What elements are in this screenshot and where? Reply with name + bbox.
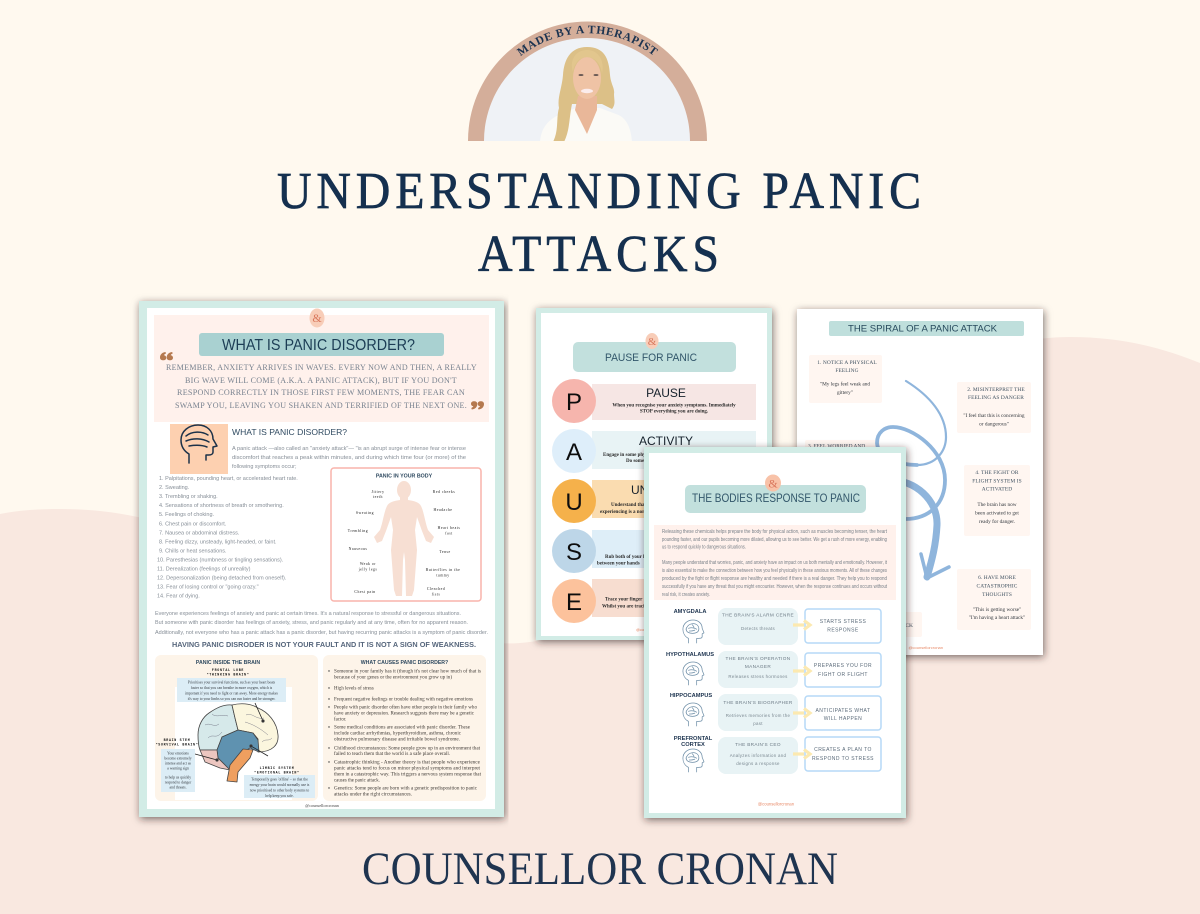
causes list [334,670,482,798]
causes list: Childhood circumstances: Some people grow up in an environment that [334,746,481,752]
symptom list: 1. Palpitations, pounding heart, or accelerated heart rate. [159,476,298,482]
row: hippocampus [670,693,881,731]
logo badge [310,308,324,328]
step 6: "This is getting worse" [973,607,1021,613]
body labels: Tense [439,550,451,554]
brain labels: "SURVIVAL BRAIN" [156,742,198,746]
logo badge: & [312,311,322,325]
row: amygdala: Detects threats [741,626,776,631]
heading bar: THE SPIRAL OF A PANIC ATTACK [848,324,997,334]
bold statement: HAVING PANIC DISRODER IS NOT YOUR FAULT AND IT IS NOT A SIGN OF WEAKNESS. [172,640,476,649]
intro panel: is also essential to make the connection between how you feel physically in these anxious moments. All of these changes [662,568,887,574]
page handle: @counsellorcronan [305,803,340,808]
page handle: @counsellorcronan [758,802,795,806]
callout: limbic system: now prioritised to other body systems to [250,788,309,792]
step U: experiencing is a normal response [600,510,673,515]
page: what is panic disorder [139,301,504,817]
row: hypothalamus: MANAGER [745,664,771,669]
page sheet [797,309,1043,655]
step S: between your hands [597,562,640,566]
row: amygdala: THE BRAIN'S ALARM CENRE [722,612,794,618]
quote text: REMEMBER, ANXIETY ARRIVES IN WAVES. EVERY NOW AND THEN, A REALLY [166,362,477,372]
callout: brain stem: intense and act as [165,762,192,766]
causes list: factor. [334,718,346,722]
body labels: Jittery [372,490,384,494]
background pink wave [0,337,1200,914]
row: prefrontal cortex: Analyzes information and [730,753,787,758]
symptom list: 3. Trembling or shaking. [159,494,218,500]
causes list: Someone in your family has it (though it's not clear how much of that is [334,670,481,674]
step 4: ACTIVATED [982,486,1012,492]
symptom list: 5. Feelings of choking. [159,512,215,518]
body labels: Headache [434,508,452,512]
callout: brain stem: Your emotions [167,752,189,756]
causes list: People with panic disorder often have other people in their family who [334,706,478,710]
symptom list: 4. Sensations of shortness of breath or smothering. [159,503,284,509]
bullet markers [328,670,330,789]
row: amygdala: RESPONSE [827,628,859,634]
body labels: Chest pain [354,590,376,594]
row: hippocampus: WILL HAPPEN [824,716,862,722]
logo badge: & [768,476,778,490]
portrait photo [484,38,690,142]
step S: Rub both of your hands [605,555,656,560]
row: hypothalamus: THE BRAIN'S OPERATION [726,656,790,661]
panel: panic in your body [331,468,481,601]
causes list: Genetics: Some people are born with a genetic predisposition to panic [334,786,478,792]
intro paragraph: A panic attack —also called an "anxiety attack"— "is an abrupt surge of intense fear or intense [232,446,466,452]
step E: Trace your finger [605,598,643,602]
step 5 [850,612,922,637]
step U: UNDERSTAND [631,483,714,497]
step A: A [566,439,582,466]
body labels: fists [432,592,440,596]
intro panel: us to respond quickly to dangerous situations. [662,544,746,550]
quote text [166,362,477,410]
callout: brain stem: respond to danger [165,780,192,784]
heading bar [829,321,1024,336]
intro paragraph: following symptoms occur; [232,464,297,470]
callout: limbic system [244,775,315,798]
row: hippocampus: ANTICIPATES WHAT [816,708,870,714]
body labels: Clenched [427,587,445,591]
row: prefrontal cortex: RESPOND TO STRESS [812,756,874,762]
panel: panic inside the brain [155,655,318,801]
row: hippocampus: past [753,721,763,726]
title: ATTACKS [478,224,719,282]
intro panel: successfully if you have any threat that you might encounter. However, when the response continues and occurs without [662,584,888,590]
quote panel [154,308,489,422]
step 6 [957,569,1031,630]
page inner white [649,453,901,813]
body silhouette [374,481,434,596]
step P: STOP everything you are doing. [640,410,709,414]
step E [552,579,756,623]
causes list: obstructive pulmonary disease and irritable bowel syndrome. [334,738,460,742]
step P: When you recognise your anxiety symptoms. Immediately [612,404,736,408]
symptom list: 10. Paresthesias (numbness or tingling sensations). [157,558,284,564]
step 6: THOUGHTS [982,592,1012,598]
row: amygdala [674,608,881,645]
panel: panic inside the brain: PANIC INSIDE THE BRAIN [196,660,260,666]
step 2: 2. MISINTERPRET THE [967,387,1025,393]
page inner white [147,308,495,809]
body labels: teeth [373,495,383,499]
heading bar: WHAT IS PANIC DISORDER? [222,337,415,354]
step A: Do some [626,459,645,464]
panel: what causes panic disorder: WHAT CAUSES PANIC DISORDER? [361,660,448,666]
brain labels: BRAIN STEM [164,738,190,742]
page: the bodies response to panic [644,447,906,818]
title [277,161,921,282]
symptom list [157,476,298,600]
symptom list: 12. Depersonalization (being detached from oneself). [157,576,287,582]
panel: what causes panic disorder [323,655,486,801]
therapist arch badge [468,22,707,141]
intro panel: Releasing these chemicals helps prepare the body for physical action, such as muscles becoming tenser, the heart [662,529,888,535]
body labels: Heart beats [438,526,460,530]
row: hippocampus: Retrieves memories from the [726,713,790,718]
symptom list: 7. Nausea or abdominal distress. [159,530,240,536]
page frame [644,447,906,818]
row: prefrontal cortex: designs a response [736,761,780,766]
title: UNDERSTANDING PANIC [277,161,921,219]
body labels: Butterflies in the [426,568,460,572]
callout: frontal lobe: important if you need to fight or run away. More energy makes [185,692,278,696]
causes list: attacks under the right circumstances. [334,792,412,798]
body labels: Sweating [356,511,374,515]
step U: Understand that what you are [611,503,676,508]
row: hypothalamus [666,651,881,688]
step 3: 3. FEEL WORRIED AND [808,444,865,450]
callout: brain stem: and threats. [170,786,187,790]
intro paragraph: discomfort that reaches a peak within minutes, and during which time four (or more) of the [232,455,466,461]
causes list: High levels of stress [334,686,374,692]
causes list: include cardiac arrhythmias, hyperthyroidism, asthma, chronic [334,732,462,736]
opening quote mark [160,352,173,360]
step 4: The brain has now [977,502,1017,508]
body labels: Weak or [360,562,376,566]
causes list: because of your genes or the environment you grow up in) [334,676,452,680]
brain labels: FRONTAL LOBE [212,668,244,672]
row: prefrontal cortex: PREFRONTAL [674,736,713,742]
causes list: Some medical conditions are associated with panic disorder. These [334,726,470,730]
brain labels: "EMOTIONAL BRAIN" [254,770,300,774]
closing quote mark [471,401,484,410]
symptom list: 11. Derealization (feelings of unreality) [157,566,251,572]
step 2: or dangerous" [979,422,1009,428]
explanatory paragraph: Everyone experiences feelings of anxiety and panic at certain times. It's a natural response to stressful or dangerous situations. [155,611,461,617]
page handle: @counsellorcronan [636,627,671,632]
callout: frontal lobe [177,678,286,702]
quote text: BIG WAVE WILL COME (A.K.A. A PANIC ATTACK), BUT IF YOU DON'T [185,375,457,385]
page: the spiral of a panic attack [797,309,1043,655]
callout: frontal lobe: Prioritises your survival functions, such as your heart beats [188,680,276,686]
causes list: causes the panic attack. [334,778,380,784]
body labels: Nauseous [349,547,367,551]
callout: limbic system: Temporarily goes 'offline' – so that the [251,778,308,782]
page frame [536,308,772,640]
step 4: ready for danger. [979,518,1015,525]
step 1: "My legs feel weak and [820,380,870,388]
body labels: jelly legs [358,568,377,572]
causes list: Frequent negative feelings or trouble dealing with negative emotions [334,698,473,702]
step 4: 4. THE FIGHT OR [975,470,1019,476]
body labels: Trembling [348,529,368,533]
row: prefrontal cortex: CORTEX [681,742,705,748]
step S [552,529,756,573]
intro panel [654,525,896,600]
logo badge: & [648,336,657,348]
step 4: FLIGHT SYSTEM IS [972,478,1022,484]
quote text: SWAMP YOU, LEAVING YOU SHAKEN AND TERRIFIED OF THE NEXT ONE. [175,400,467,410]
step E: E [566,589,582,616]
body labels: Red cheeks [433,490,455,494]
causes list: them in a catastrophic way. This triggers a nervous system response that [334,772,482,778]
step U [552,479,756,523]
page inner white [541,313,767,636]
causes list: have anxiety or depression. Research suggests there may be a genetic [334,712,475,716]
row: hypothalamus: Releases stress hormones [728,674,788,679]
body labels [348,490,460,596]
step 3 [805,440,880,490]
causes list: panic attacks tend to focus on minor physical symptoms and interpret [334,766,481,772]
step 2: FEELING AS DANGER [968,395,1024,401]
brain labels [156,668,300,774]
step 2: "I feel that this is concerning [963,412,1025,419]
step 6: "I'm having a heart attack" [969,615,1025,621]
icon: brain in head [170,424,228,474]
subheading: WHAT IS PANIC DISORDER? [232,427,347,437]
explanatory paragraph [155,611,488,636]
step 1 [809,355,882,403]
callout: brain stem: to help us quickly [165,776,191,780]
step 6: 6. HAVE MORE [978,575,1016,581]
step S: S [566,539,582,566]
logo badge [646,333,658,349]
row: hypothalamus: PREPARES YOU FOR [814,663,872,669]
step U: U [565,489,583,516]
logo badge [765,474,781,492]
intro panel: produced by the fight or flight response are healthy and needed if there is a real danger. They help you to respond [662,576,887,582]
heading bar: PAUSE FOR PANIC [605,352,697,364]
row: prefrontal cortex: CREATES A PLAN TO [814,747,872,753]
symptom list: 8. Feeling dizzy, unsteady, light-headed, or faint. [159,540,277,546]
brain labels: LIMBIC SYSTEM [260,766,294,770]
step 6: CATASTROPHIC [977,584,1018,590]
symptom list: 9. Chills or heat sensations. [159,548,227,554]
step P: PAUSE [646,386,686,400]
row: hypothalamus: HYPOTHALAMUS [666,652,714,658]
step 4 [964,465,1030,536]
symptom list: 14. Fear of dying. [157,594,200,600]
row: hypothalamus: FIGHT OR FLIGHT [818,672,868,678]
heading bar [573,342,736,372]
step A: Engage in some physical activity. [603,453,674,458]
spiral arrow [877,381,949,578]
intro panel: real risk, it creates anxiety. [662,592,710,598]
step 1: 1. NOTICE A PHYSICAL [817,360,877,366]
heading bar: THE BODIES RESPONSE TO PANIC [692,491,860,505]
heading bar [685,485,866,513]
brain diagram [195,703,278,782]
step 4: been activated to get [975,510,1019,516]
arch ring [468,21,707,141]
intro panel: Many people understand that worries, panic, and anxiety have an impact on us both mentally and emotionally. However, it [662,560,888,566]
body labels: tummy [436,574,450,578]
callout: brain stem: a warning sign [167,766,189,770]
row: hippocampus: THE BRAIN'S BIOGRAPHER [723,700,793,705]
page frame [139,301,504,817]
callout: frontal lobe: it's way to your limbs so you can run faster and be stronger. [188,697,275,701]
step 1: FEELING [835,368,859,374]
callout: limbic system: energy your brain would normally use is [250,783,310,787]
intro paragraph [232,446,466,470]
callout: limbic system: help keep you safe. [265,794,294,798]
step 2 [957,382,1031,433]
step 1: gittery" [837,390,853,396]
causes list: Catastrophic thinking - Another theory is that people who experience [334,760,480,766]
heading bar [199,333,444,356]
page: pause for panic [536,308,772,640]
intro panel: pounding faster, and our pupils becoming more dilated, allowing us to see better. We get a rush of more energy, enabling [662,537,887,543]
step A: ACTIVITY [639,434,693,448]
callout: frontal lobe: faster so that you can breathe in more oxygen, which is [191,686,273,691]
row: amygdala: STARTS STRESS [820,619,866,625]
row: amygdala: AMYGDALA [674,609,706,615]
symptom list: 6. Chest pain or discomfort. [159,522,227,528]
body labels: fast [445,532,453,536]
step 5: PANIC ATTACK [875,623,913,629]
explanatory paragraph: Additionally, not everyone who has a panic attack has a panic disorder, but having recurring panic attacks is a symptom of panic disorder. [155,630,488,636]
row: hippocampus: HIPPOCAMPUS [670,693,712,699]
brand footer: COUNSELLOR CRONAN [362,843,838,895]
causes list: failed to teach them that the world is a safe place overall. [334,752,450,757]
row: prefrontal cortex [674,736,881,774]
callout: brain stem [161,749,195,792]
callout: brain stem: become extremely [164,756,192,760]
symptom list: 13. Fear of losing control or "going crazy." [157,584,259,590]
quote text: RESPOND CORRECTLY IN THOSE FIRST FEW MOMENTS, THE FEAR CAN [177,387,465,397]
arch caption: MADE BY A THERAPIST [516,26,658,56]
panel: panic in your body: PANIC IN YOUR BODY [376,474,433,480]
step P [552,379,756,423]
step E: Whilst you are tracing [602,604,650,610]
brain labels: "THINKING BRAIN" [207,672,249,676]
explanatory paragraph: But someone with panic disorder has feelings of anxiety, stress, and panic regularly and at any time, often for no apparent reason. [155,620,468,626]
step P: P [566,389,582,416]
page handle: @counsellorcronan [908,645,943,650]
step A [552,429,756,473]
row: prefrontal cortex: THE BRAIN'S CEO [735,742,781,747]
symptom list: 2. Sweating. [159,485,190,491]
